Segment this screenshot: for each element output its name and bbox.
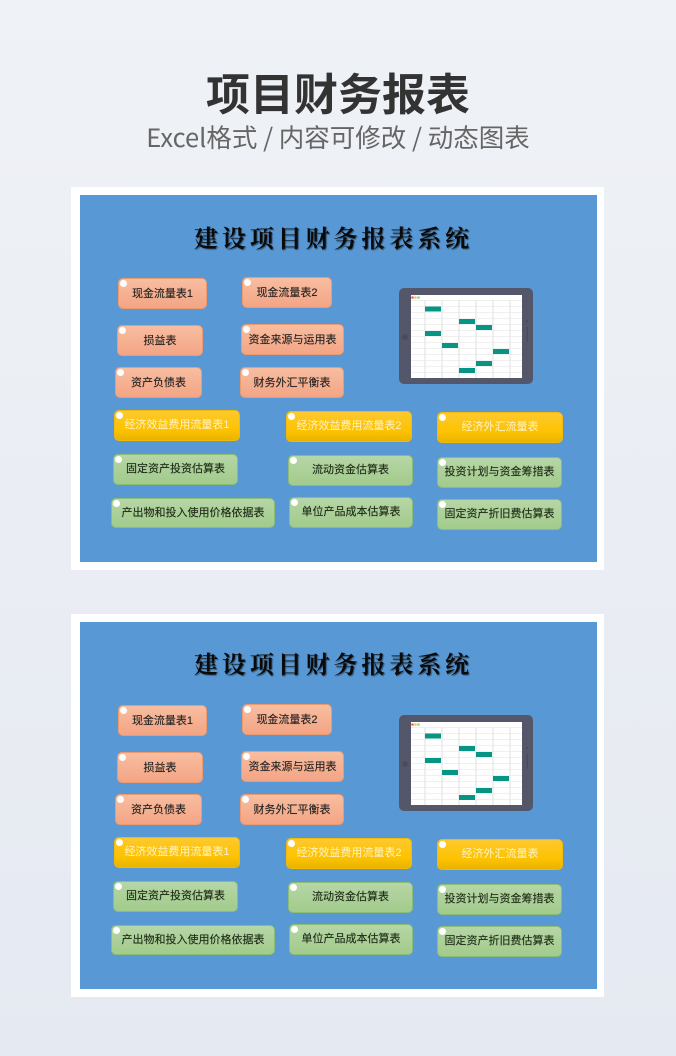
icon: tablet with gantt sheet	[399, 288, 533, 384]
button: investment plan: 投资计划与资金筹措表	[444, 893, 554, 905]
button: output and input prices	[111, 498, 275, 528]
button: working capital: 流动资金估算表	[312, 891, 389, 903]
button: cash flow 1: 现金流量表1	[132, 715, 193, 727]
button: cash flow 2: 现金流量表2	[256, 287, 318, 299]
button: unit product cost	[289, 497, 413, 528]
button: fixed asset investment: 固定资产投资估算表	[126, 463, 225, 475]
button: economic cost flow 1: 经济效益费用流量表1	[124, 419, 230, 431]
button: cash flow 2	[242, 277, 332, 308]
button: economic cost flow 2	[286, 411, 412, 442]
button: forex balance: 财务外汇平衡表	[254, 804, 330, 816]
panel heading: 建设项目财务报表系统	[194, 227, 473, 253]
panel: system preview 2	[71, 614, 604, 997]
button: forex balance: 财务外汇平衡表	[254, 377, 330, 389]
button: forex balance	[240, 367, 344, 398]
button: balance sheet: 资产负债表	[131, 377, 186, 389]
button: income statement	[117, 752, 203, 783]
button: economic forex flow	[437, 412, 563, 443]
button: cash flow 2: 现金流量表2	[256, 714, 318, 726]
button: balance sheet: 资产负债表	[131, 804, 186, 816]
button: income statement: 损益表	[144, 335, 176, 347]
button: working capital	[288, 882, 413, 913]
button: sources and uses of funds	[241, 324, 344, 355]
button: sources and uses of funds	[241, 751, 344, 782]
button: cash flow 1	[118, 705, 207, 736]
button: output and input prices	[111, 925, 275, 955]
button: economic forex flow: 经济外汇流量表	[462, 848, 538, 860]
button: fixed asset investment	[113, 454, 238, 485]
button: unit product cost: 单位产品成本估算表	[302, 506, 400, 518]
subtitle: Excel格式 / 内容可修改 / 动态图表	[146, 118, 530, 155]
button: economic cost flow 2: 经济效益费用流量表2	[296, 420, 402, 432]
panel heading: 建设项目财务报表系统	[194, 653, 473, 679]
panel: system preview 1	[71, 187, 604, 570]
button: investment plan	[437, 457, 562, 488]
button: output and input prices: 产出物和投入使用价格依据表	[122, 934, 264, 946]
button: economic cost flow 2: 经济效益费用流量表2	[296, 847, 402, 859]
button: cash flow 1: 现金流量表1	[132, 288, 193, 300]
panel background	[80, 622, 597, 989]
button: fixed asset depreciation: 固定资产折旧费估算表	[444, 508, 554, 520]
button: economic cost flow 2	[286, 838, 412, 869]
button: working capital: 流动资金估算表	[312, 464, 389, 476]
icon: tablet with gantt sheet	[399, 715, 533, 811]
button: income statement: 损益表	[144, 762, 176, 774]
button: sources and uses of funds: 资金来源与运用表	[248, 761, 336, 773]
title: 项目财务报表	[206, 71, 470, 120]
button: fixed asset depreciation	[437, 926, 562, 957]
button: income statement	[117, 325, 203, 356]
button: investment plan: 投资计划与资金筹措表	[444, 466, 554, 478]
button: fixed asset depreciation	[437, 499, 562, 530]
button: economic cost flow 1	[114, 410, 240, 441]
button: investment plan	[437, 884, 562, 915]
button: forex balance	[240, 794, 344, 825]
panel background	[80, 195, 597, 562]
button: economic forex flow: 经济外汇流量表	[462, 421, 538, 433]
button: unit product cost	[289, 924, 413, 955]
button: cash flow 2	[242, 704, 332, 735]
button: fixed asset investment: 固定资产投资估算表	[126, 890, 225, 902]
button: cash flow 1	[118, 278, 207, 309]
button: sources and uses of funds: 资金来源与运用表	[248, 334, 336, 346]
button: unit product cost: 单位产品成本估算表	[302, 933, 400, 945]
button: balance sheet	[115, 794, 202, 825]
button: economic cost flow 1	[114, 837, 240, 868]
button: economic cost flow 1: 经济效益费用流量表1	[124, 846, 230, 858]
button: output and input prices: 产出物和投入使用价格依据表	[122, 507, 264, 519]
button: fixed asset investment	[113, 881, 238, 912]
button: balance sheet	[115, 367, 202, 398]
button: economic forex flow	[437, 839, 563, 870]
button: working capital	[288, 455, 413, 486]
button: fixed asset depreciation: 固定资产折旧费估算表	[444, 935, 554, 947]
